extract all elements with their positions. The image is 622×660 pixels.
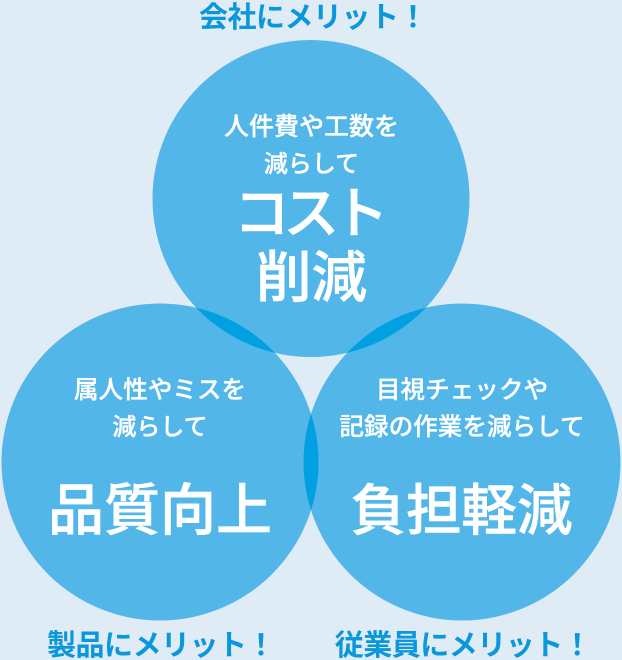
text: quality circle: 属人性やミスを [74, 376, 246, 404]
text: workload circle: 負担軽減 [350, 480, 573, 542]
circle: workload reduction [304, 304, 620, 620]
text: cost circle: 人件費や工数を [224, 113, 399, 141]
circle: quality improvement [2, 304, 318, 620]
text: quality circle: 品質向上 [48, 479, 272, 542]
heading: company merit: 会社にメリット！ [199, 1, 427, 34]
text: cost circle: コスト [234, 182, 382, 245]
text: workload circle: 記録の作業を減らして [339, 413, 585, 441]
text: cost circle: 減らして [264, 151, 359, 178]
text: workload circle [339, 376, 585, 542]
text: cost circle [224, 113, 399, 309]
circle: cost reduction [152, 40, 470, 357]
overlap: left and right [304, 414, 318, 510]
text: cost circle: 削減 [256, 247, 367, 309]
text: quality circle: 減らして [112, 414, 208, 441]
text: quality circle [48, 376, 272, 542]
overlap: top and left [196, 308, 275, 353]
text: workload circle: 目視チェックや [376, 376, 548, 404]
overlap: top and right [347, 308, 426, 353]
